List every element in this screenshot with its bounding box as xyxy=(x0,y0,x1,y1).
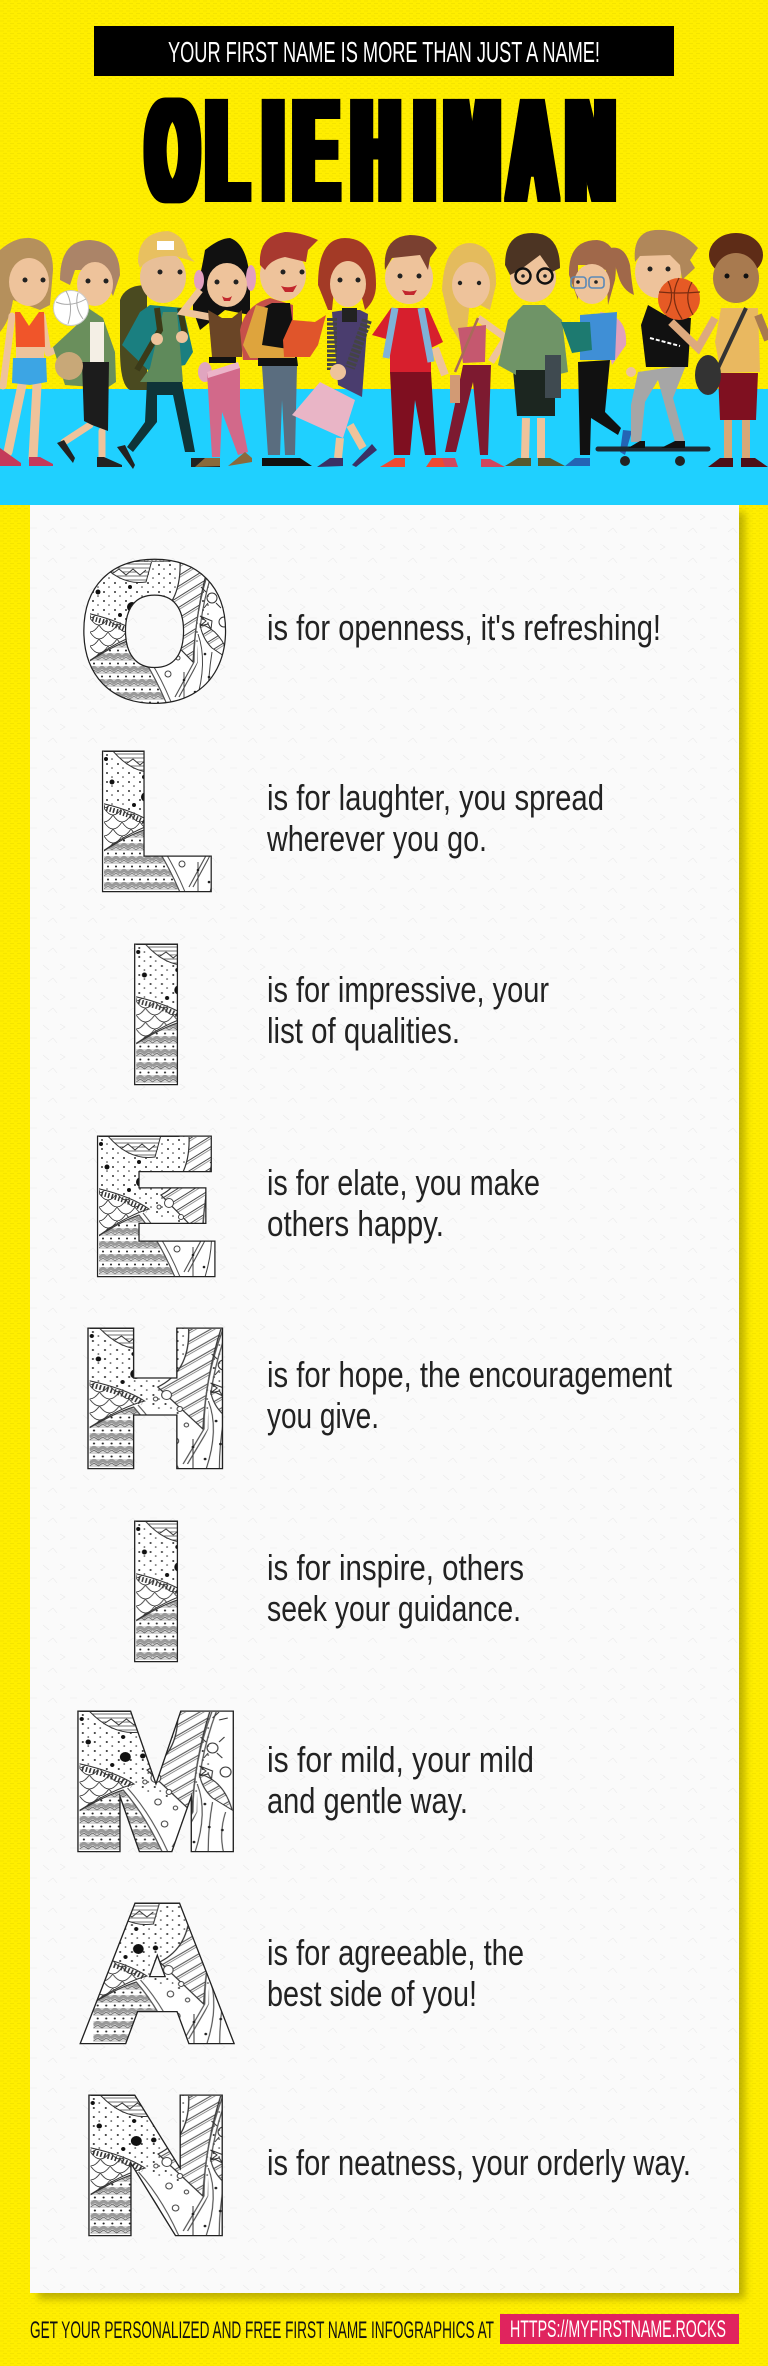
row A xyxy=(87,1871,524,2075)
row I xyxy=(130,913,549,1116)
letter O: O xyxy=(84,529,226,733)
figure 7: boy in red shirt xyxy=(372,235,453,467)
text A: is for agreeable, the xyxy=(267,1932,524,1973)
letter I: I xyxy=(130,1490,182,1693)
row L xyxy=(98,719,604,923)
text I: is for impressive, your xyxy=(267,969,549,1010)
figure 5: boy with red backpack and book xyxy=(240,232,326,466)
letter I: I xyxy=(130,1490,182,1693)
white panel xyxy=(30,505,745,2299)
text H: is for hope, the encouragement xyxy=(267,1354,672,1395)
row M xyxy=(73,1681,534,1883)
figure 10: girl with ponytail and book xyxy=(561,240,634,466)
text I: is for inspire, others xyxy=(267,1547,524,1588)
figure 11: boy with basketball on skateboard xyxy=(598,230,715,466)
letter N: N xyxy=(84,2065,227,2267)
figure 8: blonde girl xyxy=(442,243,506,467)
row H xyxy=(83,1296,672,1500)
letter E: E xyxy=(93,1104,214,1308)
text L: is for laughter, you spread xyxy=(267,777,604,818)
illustration: group of students xyxy=(0,230,768,469)
row E: others happy. xyxy=(267,1203,444,1244)
letter E: E xyxy=(93,1104,214,1308)
letter L: L xyxy=(98,719,209,923)
figure 2: girl with volleyball xyxy=(53,240,122,467)
row L: wherever you go. xyxy=(266,818,487,859)
letter M: M xyxy=(73,1681,238,1883)
header banner xyxy=(94,26,674,76)
figure 12: boy in tank top with bag xyxy=(695,233,768,467)
row N xyxy=(84,2065,691,2267)
letter M: M xyxy=(73,1681,238,1883)
letter A: A xyxy=(87,1871,228,2075)
row E xyxy=(93,1104,540,1308)
figure 3: boy with cap and backpack xyxy=(117,231,220,469)
row H: you give. xyxy=(267,1395,379,1436)
letter I: I xyxy=(130,913,182,1116)
text O: is for openness, it's refreshing! xyxy=(267,607,661,648)
letter H: H xyxy=(83,1296,228,1500)
title: OLIEHIMAN xyxy=(148,69,613,231)
row M: and gentle way. xyxy=(267,1780,468,1821)
figure 9: boy with glasses xyxy=(498,233,568,466)
letter H: H xyxy=(83,1296,228,1500)
text E: is for elate, you make xyxy=(267,1162,540,1203)
letter A: A xyxy=(87,1871,228,2075)
row I second xyxy=(130,1490,524,1693)
figure 1: girl in orange top xyxy=(0,238,76,466)
letter N: N xyxy=(84,2065,227,2267)
figure 4: girl with headphones xyxy=(183,238,256,467)
row A: best side of you! xyxy=(267,1973,477,2014)
figure 6: girl with pink bag xyxy=(292,238,377,467)
letter O: O xyxy=(84,529,226,733)
row I second: seek your guidance. xyxy=(267,1588,521,1629)
cyan floor band xyxy=(0,389,768,505)
letter I: I xyxy=(130,913,182,1116)
letter L: L xyxy=(98,719,209,923)
row O xyxy=(84,529,661,733)
text M: is for mild, your mild xyxy=(267,1739,534,1780)
row I: list of qualities. xyxy=(267,1010,460,1051)
